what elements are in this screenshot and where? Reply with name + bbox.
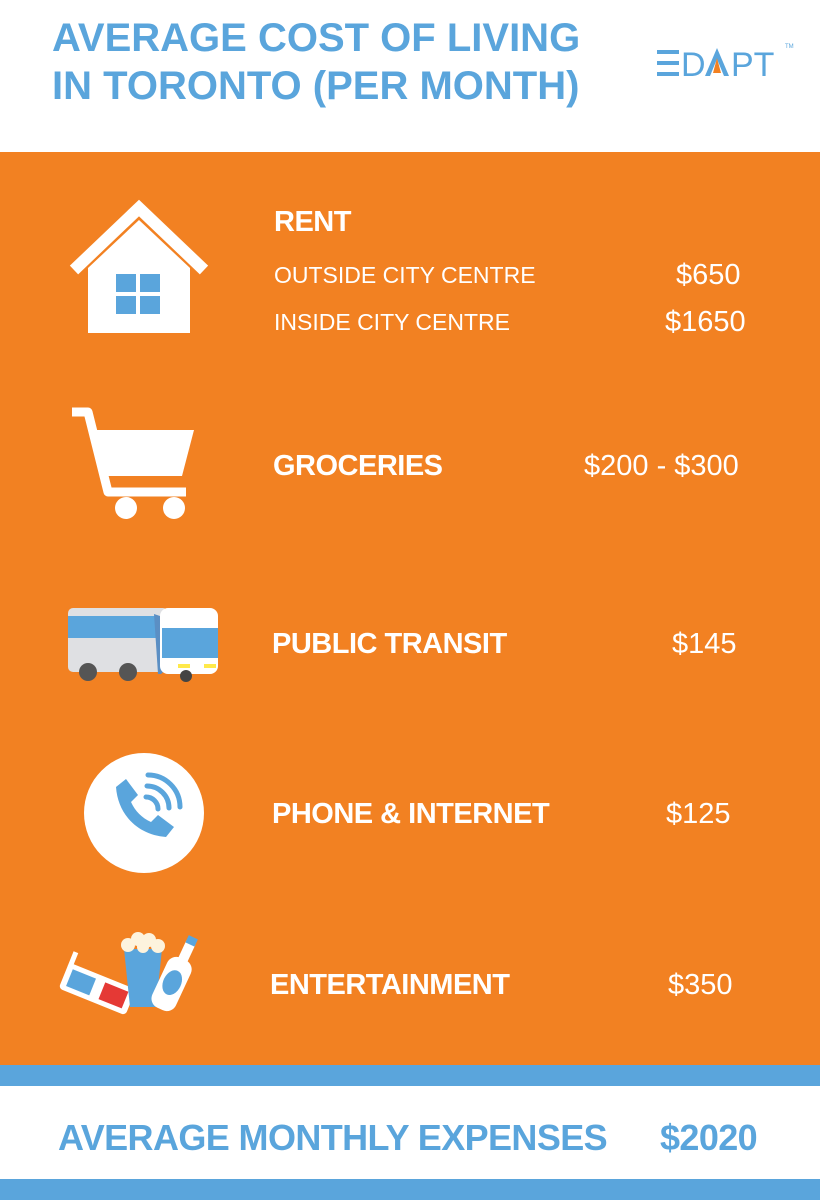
public transit: PUBLIC TRANSIT [272, 628, 507, 660]
rent label: RENT [274, 206, 351, 238]
icon: house [70, 200, 208, 333]
title: IN TORONTO (PER MONTH) [52, 64, 579, 108]
total row: AVERAGE MONTHLY EXPENSES [58, 1117, 607, 1158]
panel: orange background: $1650 [665, 306, 746, 338]
panel: orange background [0, 152, 820, 1065]
entertainment: ENTERTAINMENT [270, 969, 509, 1001]
panel: orange background: $650 [676, 259, 741, 291]
phone & internet: PHONE & INTERNET [272, 798, 549, 830]
panel: orange background: $200 - $300 [584, 450, 739, 482]
logo: EDAPT [657, 44, 794, 84]
logo: EDAPT: D [681, 46, 706, 84]
panel: orange background: $125 [666, 798, 731, 830]
blue band bottom [0, 1179, 820, 1200]
icon: cart [72, 408, 194, 519]
title [52, 16, 580, 108]
icon: entertainment [60, 932, 198, 1014]
groceries: GROCERIES [273, 450, 443, 482]
rent sub rows: OUTSIDE CITY CENTRE [274, 262, 536, 288]
title: AVERAGE COST OF LIVING [52, 16, 580, 60]
logo: EDAPT: PT [731, 46, 774, 84]
panel: orange background: $350 [668, 969, 733, 1001]
panel: orange background: $145 [672, 628, 737, 660]
blue band top [0, 1065, 820, 1086]
icon: phone [84, 753, 204, 873]
panel: orange background: INSIDE CITY CENTRE [274, 309, 510, 335]
logo: EDAPT: TM [785, 44, 794, 50]
total row: $2020 [660, 1117, 757, 1158]
icon: bus [68, 608, 218, 682]
